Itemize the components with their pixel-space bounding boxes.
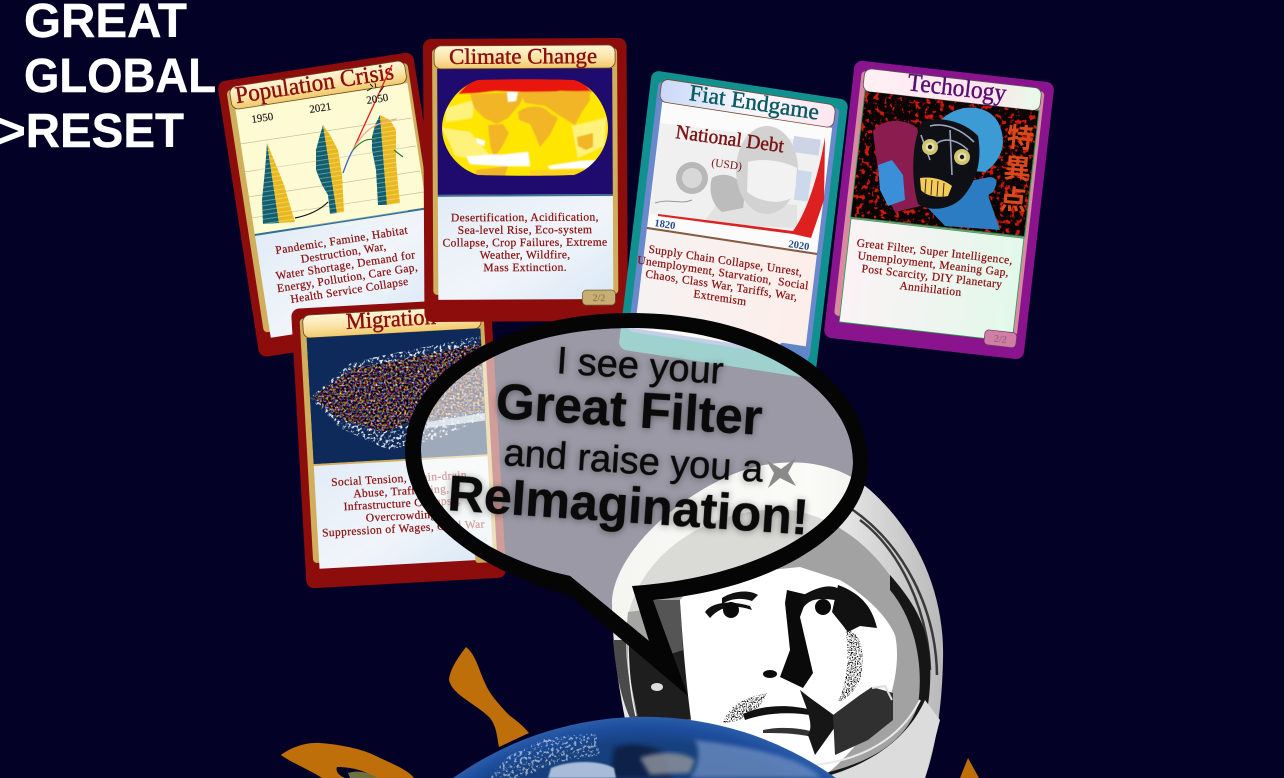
gray star bbox=[766, 458, 796, 488]
climate caption: Sea-level Rise, Eco-system bbox=[458, 224, 592, 237]
fiat caption bbox=[634, 242, 811, 317]
climate caption: Weather, Wildfire, bbox=[480, 249, 571, 262]
climate card frame: Climate Change bbox=[449, 43, 597, 69]
fiat caption: Supply Chain Collapse, Unrest, bbox=[648, 244, 803, 279]
population caption: Destruction, War, bbox=[300, 241, 387, 266]
bubble text bbox=[446, 340, 810, 546]
population pyramid chart: 1950 bbox=[251, 111, 275, 126]
climate caption: Collapse, Crop Failures, Extreme bbox=[443, 237, 608, 249]
skull android artwork: 特 bbox=[1005, 122, 1035, 154]
population pyramid chart: 2050 bbox=[366, 92, 390, 107]
helmet rim stripes bbox=[850, 508, 937, 675]
title bbox=[0, 0, 216, 158]
card: Techology bbox=[823, 60, 1055, 360]
card: Migration bbox=[291, 298, 506, 589]
helmet left edge bbox=[613, 640, 638, 718]
orange flames bbox=[281, 647, 979, 778]
national debt labels: 2020 bbox=[788, 239, 810, 253]
migration caption: Abuse, Trafficking, bbox=[353, 483, 450, 500]
technology caption and badge: 2/2 bbox=[993, 334, 1007, 346]
helmet interior bbox=[627, 604, 705, 720]
technology card frame: Techology bbox=[906, 69, 1008, 107]
face bbox=[680, 567, 897, 778]
migration caption: Suppression of Wages, Civil War bbox=[322, 519, 485, 540]
skull android artwork: 点 bbox=[998, 184, 1028, 216]
migration caption bbox=[319, 469, 485, 540]
card: Population Crisis bbox=[217, 52, 455, 358]
migrant boat photo bbox=[306, 328, 486, 464]
migration caption: Infrastructure Collapse, bbox=[343, 495, 461, 513]
migration card frame bbox=[291, 298, 506, 589]
technology card frame bbox=[823, 60, 1055, 360]
speech bubble bbox=[405, 313, 868, 696]
population pyramid chart bbox=[240, 65, 424, 227]
climate caption bbox=[442, 211, 615, 306]
population card frame bbox=[217, 52, 455, 358]
fiat caption: Unemployment, Starvation, Social bbox=[637, 254, 809, 293]
national debt labels: (USD) bbox=[711, 157, 743, 173]
national debt labels: 1820 bbox=[654, 218, 676, 232]
face shadows and features bbox=[651, 585, 893, 755]
population caption: Energy, Pollution, Care Gap, bbox=[276, 262, 419, 295]
helmet shell bbox=[612, 462, 943, 778]
fiat caption: Chaos, Class War, Tariffs, War, bbox=[645, 268, 798, 303]
bubble text: ReImagination! bbox=[446, 465, 810, 546]
population caption: Health Service Collapse bbox=[290, 276, 409, 306]
national debt labels: National Debt bbox=[674, 121, 786, 157]
card: Climate Change bbox=[423, 38, 628, 322]
population pyramid chart: 2021 bbox=[309, 101, 332, 116]
technology caption and badge: Annihilation bbox=[899, 280, 962, 299]
bubble outline bbox=[405, 313, 868, 696]
lower helmet collar bbox=[820, 700, 940, 778]
bubble text: I see your bbox=[555, 340, 725, 393]
planet earth bbox=[453, 717, 836, 778]
national debt labels bbox=[654, 121, 810, 253]
population caption bbox=[271, 224, 421, 308]
technology caption and badge: Post Scarcity, DIY Planetary bbox=[861, 263, 1003, 291]
migration card frame: Migration bbox=[345, 304, 437, 334]
technology caption and badge bbox=[847, 237, 1026, 348]
population caption: Pandemic, Famine, Habitat bbox=[275, 225, 409, 257]
skull android artwork: 異 bbox=[1002, 153, 1032, 185]
technology caption and badge: Great Filter, Super Intelligence, bbox=[856, 237, 1013, 267]
national debt chart on banknote bbox=[647, 123, 827, 238]
migration caption: Social Tension, Brain-drain, bbox=[331, 469, 470, 489]
population caption: Water Shortage, Demand for bbox=[275, 249, 416, 283]
bubble text: Great Filter bbox=[494, 373, 764, 446]
astronaut portrait bbox=[612, 462, 943, 778]
climate caption: 2/2 bbox=[592, 293, 605, 304]
population card frame: Population Crisis bbox=[233, 59, 396, 109]
technology caption and badge: Unemployment, Meaning Gap, bbox=[857, 250, 1010, 279]
title: >RESET bbox=[0, 105, 184, 158]
migration caption: Overcrowding, bbox=[366, 509, 440, 525]
climate caption: Mass Extinction. bbox=[483, 262, 567, 274]
climate caption: Desertification, Acidification, bbox=[451, 212, 599, 224]
bubble text: and raise you a bbox=[502, 432, 765, 491]
skull android artwork bbox=[851, 91, 1038, 236]
climate card frame bbox=[423, 38, 628, 322]
title: GLOBAL bbox=[24, 50, 216, 103]
fiat card frame: Fiat Endgame bbox=[688, 80, 820, 125]
helmet inner band bbox=[627, 510, 925, 778]
bubble fill bbox=[421, 328, 853, 641]
world temperature map bbox=[442, 79, 608, 176]
card: Fiat Endgame bbox=[618, 70, 849, 379]
fiat card frame bbox=[618, 70, 849, 379]
fiat caption: Extremism bbox=[693, 288, 747, 308]
